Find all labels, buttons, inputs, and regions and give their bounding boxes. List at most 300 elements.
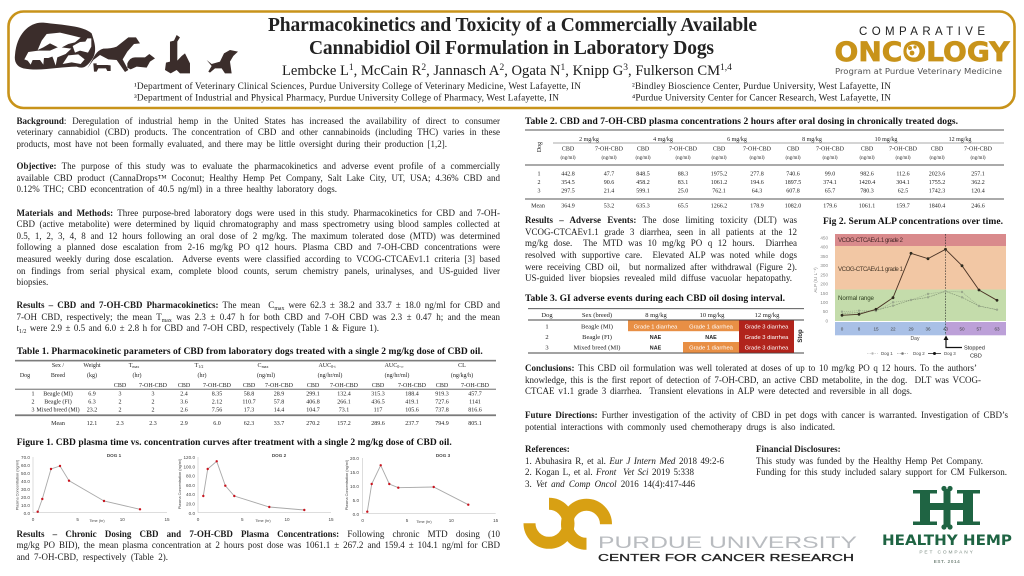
table 2: 83.1: [678, 180, 688, 186]
table 1: 7-OH-CBD: [139, 383, 168, 389]
chart: serum ALP over time: Day: [911, 336, 920, 342]
authors: Lembcke L1, McCain R2, Jannasch A2, Ogata N1, Knipp G3, Fulkerson CM1,4: [282, 63, 732, 79]
table 2: 599.1: [636, 188, 650, 194]
table 1: 117: [374, 408, 382, 414]
logo: Comparative Oncology: [834, 26, 1010, 76]
table 1: 14.4: [274, 408, 284, 414]
line chart: dog 2: 0: [197, 517, 200, 522]
table 2: 297.5: [561, 188, 575, 194]
table 2: (ng/ml): [560, 156, 576, 161]
logo: Healthy Hemp Pet Company: PET COMPANY: [919, 550, 975, 556]
table 1: 2.6: [180, 408, 188, 414]
table 2: 607.8: [786, 188, 800, 194]
text: materials and methods: Materials and Methods: Three purpose-bred laboratory dogs were used in this study. Pharmacokinetics for CBD and 7-OH-: [16, 208, 500, 218]
affiliations: ⁴Purdue University Center for Cancer Research, West Lafayette, IN: [632, 92, 891, 103]
line chart: dog 2: DOG 2: [272, 453, 287, 458]
text: chronic dosing results: and 7-OH-CBD, respectively (Table 2).: [16, 552, 168, 562]
line chart: dog 3: 15.0: [350, 470, 359, 475]
table 1: 1: [32, 392, 34, 398]
line chart: dog 1: 0: [32, 517, 35, 522]
table 2: 374.1: [823, 180, 837, 186]
table 1: T: [129, 363, 133, 369]
line chart: dog 1: 15: [164, 517, 170, 522]
table 2: Dog: [537, 142, 543, 152]
line chart: dog 1: DOG 1: [107, 453, 122, 458]
line chart: dog 2: 15: [328, 517, 334, 522]
table 1: 2: [118, 400, 122, 406]
table 2: 62.5: [898, 188, 908, 194]
text: adverse events results: US-guided liver biopsies revealed mild diffuse vacuolar hepatopathy.: [525, 273, 792, 283]
table 1: 2: [32, 400, 34, 406]
table 1: 105.6: [405, 408, 419, 414]
line chart: dog 3: 10: [449, 518, 454, 523]
table 2: 3: [538, 188, 540, 194]
chart: serum ALP over time: 150: [820, 291, 828, 296]
table 2: (ng/ml): [676, 156, 691, 161]
chart: serum ALP over time: [813, 234, 1006, 360]
line chart: dog 3: 5.0: [353, 498, 359, 503]
table 2: 1840.4: [929, 204, 945, 210]
table 1: 7-OH-CBD: [330, 383, 359, 389]
title: Pharmacokinetics and Toxicity of a Commercially Available: [268, 15, 757, 36]
line chart: dog 3: 0.0: [353, 512, 359, 517]
table 1: (ng/kg/h): [451, 372, 473, 379]
table 3: Beagle (MI): [581, 324, 613, 330]
table 3: Sex (breed): [582, 312, 612, 319]
table 1: CBD: [372, 383, 385, 389]
table 3: 8 mg/kg: [645, 312, 667, 319]
line chart: dog 3: Plasma Concentration (ng/ml): [345, 459, 349, 510]
table 3: Grade 1 diarrhea: [689, 346, 734, 352]
line chart: dog 2: 100.0: [184, 464, 195, 469]
table 2: 982.6: [860, 172, 874, 178]
table 1: 7-OH-CBD: [265, 383, 294, 389]
logo: Comparative Oncology: ONCOLOGY: [834, 37, 1010, 68]
table 2: 64.3: [752, 188, 762, 194]
table 2: 21.4: [604, 188, 614, 194]
line chart: dog 2: 40.0: [186, 492, 195, 497]
table 2: 2023.6: [929, 172, 945, 178]
table 1: (ng/ml): [257, 372, 275, 379]
table 1: [15, 360, 496, 427]
figure 1 caption: Figure 1. CBD plasma time vs. concentration curves after treatment with a single 2 mg/kg dose of CBD oil.: [17, 438, 452, 448]
text: conclusions: CTCAE v1.1 grade 3 diarrhea. Transient elevations in ALP were detected and reversible in all dogs.: [525, 386, 912, 396]
table 3: 2: [545, 334, 549, 341]
table 1: 188.4: [405, 392, 419, 398]
table 1: 12.1: [87, 421, 97, 427]
chart: serum ALP over time: CBD: [970, 354, 982, 360]
chart: serum ALP over time: VCOG-CTCAEv1.1 grade 2: [838, 237, 904, 244]
table 2: (ng/ml): [970, 156, 986, 161]
text: future directions: [525, 410, 1008, 432]
table 3: Grade 1 diarrhea: [634, 324, 678, 330]
table 2 caption: Table 2. CBD and 7-OH-CBD plasma concentrations 2 hours after oral dosing in chronically treated dogs.: [525, 117, 958, 127]
table 2: 442.8: [561, 172, 575, 178]
table 1: 2.3: [116, 421, 124, 427]
table 2: CBD: [787, 146, 800, 152]
line chart: dog 1: [16, 453, 170, 523]
table 1: 406.8: [306, 400, 320, 406]
table 2: 7-OH-CBD: [595, 146, 624, 152]
table 2: 2: [538, 180, 540, 186]
table 1: CBD: [243, 383, 256, 389]
table 2: 53.2: [604, 204, 614, 210]
table 2: 7-OH-CBD: [889, 146, 918, 152]
table 2: 7-OH-CBD: [816, 146, 845, 152]
table 1: 73.1: [339, 408, 349, 414]
table 1: max: [132, 364, 139, 369]
table 1: 8.35: [212, 392, 222, 398]
table 3: NAE: [650, 346, 662, 352]
line chart: dog 2: 60.0: [186, 483, 195, 488]
title: [268, 15, 757, 59]
line chart: dog 2: 10: [284, 517, 290, 522]
table 3: NAE: [650, 335, 662, 341]
table 2: 740.6: [786, 172, 800, 178]
table 2: CBD: [861, 146, 874, 152]
table 1: Dog: [20, 373, 30, 379]
text: adverse events results: Results – Adverse Events: The dose limiting toxicity (DLT) was: [525, 215, 797, 225]
table 1: CL: [458, 363, 466, 369]
chart: serum ALP over time: 8: [858, 326, 861, 332]
text: future directions: potential interactions with commonly used chemotherapy drugs is also indicated.: [525, 422, 835, 432]
text: financial disclosures: Funding for this study included salary support for CM Fulkerson.: [756, 467, 1007, 477]
text: materials and methods: CBD (active metabolite) were determined by liquid chromatography and mass spectrometry using blood samples collected at: [16, 219, 500, 229]
line chart: dog 3: DOG 3: [436, 453, 451, 458]
text: objective: available CBD product (CannaDrops™ Coconut; Healthy Hemp Pet Company, Salt Lake City, UT, USA; 4.36% CBD and: [16, 173, 500, 183]
title: Cannabidiol Oil Formulation in Laboratory Dogs: [309, 38, 714, 59]
line chart: dog 2: 80.0: [186, 474, 195, 479]
table 3: 10 mg/kg: [700, 312, 725, 319]
table 2: (ng/ml): [930, 156, 945, 161]
chart: serum ALP over time: Dog 2: [913, 351, 925, 356]
table 2: (ng/ml): [896, 156, 911, 161]
table 2: 1082.0: [785, 204, 801, 210]
table 1: 7-OH-CBD: [203, 383, 232, 389]
line chart: dog 2: 5: [241, 517, 244, 522]
text: materials and methods: on findings from serial physical exam, complete blood counts, serum chemistry panels, urinalyses, and US-guided liver: [16, 266, 500, 276]
table 2: 4 mg/kg: [653, 137, 673, 143]
table 1: 2.12: [212, 400, 222, 406]
table 2: 1: [538, 172, 540, 178]
text: materials and methods: following a planned dose escalation from 2-16 mg/kg PO q12 hours. Plasma CBD and 7-OH-CBD concentrations were: [16, 242, 500, 252]
table 2: 1742.3: [929, 188, 945, 194]
table 1: 727.6: [435, 400, 449, 406]
chart: serum ALP over time: Dog 3: [944, 351, 956, 356]
table 1: 132.4: [337, 392, 351, 398]
table 2: 12 mg/kg: [949, 137, 971, 143]
table 1: Mean: [51, 421, 65, 427]
table 2: 1266.2: [711, 204, 727, 210]
table 1: 7.56: [212, 408, 222, 414]
table 2: CBD: [562, 146, 575, 152]
table 2: 1975.2: [711, 172, 727, 178]
table 2: 65.7: [825, 188, 835, 194]
table 1: 3.6: [180, 400, 188, 406]
logo: Purdue University Center for Cancer Research: PURDUE UNIVERSITY: [598, 533, 857, 552]
line chart: dog 1: 20.0: [21, 495, 30, 500]
table 3: Stop: [798, 329, 804, 343]
table 2: 635.3: [636, 204, 650, 210]
table 1: 2.4: [180, 392, 188, 398]
affiliations: ³Department of Industrial and Physical Pharmacy, Purdue University College of Pharmacy, West Lafayette, IN: [134, 92, 559, 103]
line chart: dog 1: 50.0: [21, 471, 30, 476]
table 2: 120.4: [971, 188, 985, 194]
line chart: dog 3: [345, 453, 499, 524]
table 1: CBD: [114, 383, 127, 389]
table 1: Sex /: [52, 363, 64, 369]
table 2: 65.5: [678, 204, 688, 210]
table 2: 90.6: [604, 180, 614, 186]
table 3: 3: [545, 344, 549, 352]
table 1: CBD: [436, 383, 449, 389]
chart: serum ALP over time: 29: [908, 326, 914, 332]
chart: serum ALP over time: 50: [959, 326, 965, 332]
table 1: 2.9: [180, 421, 188, 427]
table 1: (hr): [198, 372, 206, 379]
text: background: [16, 116, 500, 149]
table 2: CBD: [713, 146, 726, 152]
table 2: 112.6: [896, 172, 910, 178]
line chart: dog 3: Time (hr): [416, 520, 432, 524]
text: financial disclosures: Financial Disclosures:: [756, 444, 841, 454]
table 1: Weight: [83, 363, 101, 369]
text: conclusions: knowledge, this is the first report of detection of 7-OH-CBD, an active CBD metabolite, in the dog. DLT was VCOG-: [525, 375, 981, 385]
table 1: 289.6: [371, 421, 385, 427]
table 1: 28.9: [274, 392, 284, 398]
chart: serum ALP over time: ALP (IU L⁻¹): [813, 267, 818, 293]
table 3: NAE: [705, 335, 717, 341]
line chart: dog 1: 5: [76, 517, 79, 522]
text: adverse events results: mg/kg dose. The MTD was 10 mg/kg PO q 12 hours. Diarrhea: [525, 238, 797, 248]
affiliations: ¹Department of Veterinary Clinical Sciences, Purdue University College of Veterinary Medicine, West Lafayette, IN: [134, 81, 581, 92]
table 2: 364.9: [561, 204, 575, 210]
line chart: dog 1: 30.0: [21, 487, 30, 492]
table 1: Beagle (MI): [43, 390, 73, 398]
line chart: dog 2: [178, 453, 334, 523]
table 1: (kg): [87, 372, 97, 379]
table 3: 12 mg/kg: [755, 312, 780, 319]
table 3: Dog: [541, 312, 553, 319]
chart: serum ALP over time: 57: [976, 326, 982, 332]
chart: serum ALP over time: 350: [820, 254, 828, 259]
table 2: 179.6: [823, 204, 837, 210]
table 1: 7-OH-CBD: [461, 383, 490, 389]
table 1: 1141: [469, 400, 481, 406]
text: adverse events results: [525, 215, 797, 283]
chart: serum ALP over time: 300: [820, 263, 828, 268]
chart: serum ALP over time: Stopped: [964, 346, 985, 352]
table 1: 23.2: [87, 408, 97, 414]
table 1: 6.3: [88, 400, 96, 406]
chart: serum ALP over time: 22: [890, 326, 896, 332]
line chart: dog 1: 40.0: [21, 479, 30, 484]
line chart: dog 1: Plasma Concentration (ng/ml): [16, 459, 20, 510]
line chart: dog 3: 15: [493, 518, 499, 523]
table 1: 3: [32, 408, 34, 414]
table 2: 88.3: [678, 172, 688, 178]
table 1: 6.0: [213, 421, 221, 427]
table 2: (ng/ml): [860, 156, 875, 161]
text: references: [525, 444, 724, 489]
table 1: T: [195, 363, 199, 369]
table 2: CBD: [637, 146, 650, 152]
table 1: 1/2: [198, 364, 203, 369]
table 3: [528, 309, 804, 353]
table 2: 8 mg/kg: [802, 137, 822, 143]
text: chronic dosing results: [16, 529, 500, 562]
text: financial disclosures: This study was funded by the Healthy Hemp Pet Company.: [756, 456, 983, 466]
line chart: dog 2: Plasma Concentration (ng/ml): [178, 458, 182, 509]
table 1: 919.3: [435, 392, 449, 398]
text: adverse events results: were receiving CBD oil, but normalized after withdrawal (Figure 2).: [525, 262, 797, 272]
table 3: Beagle (FI): [582, 334, 612, 341]
chart: serum ALP over time: 450: [820, 236, 828, 240]
table 2: 7-OH-CBD: [669, 146, 698, 152]
text: background: Background: Deregulation of industrial hemp in the United States has increased the availability of direct to consumer: [16, 116, 500, 126]
table 1: 58.8: [244, 392, 254, 398]
table 1: 805.1: [468, 421, 482, 427]
text: pharmacokinetics results: [16, 300, 500, 335]
text: conclusions: [525, 363, 981, 396]
text: references: 2. Kogan L, et al. Front Vet Sci 2019 5:338: [525, 467, 694, 477]
table 2: 1755.2: [929, 180, 945, 186]
table 1: 33.7: [274, 421, 284, 427]
table 1: 6.9: [88, 392, 96, 398]
logo: Healthy Hemp Pet Company: [882, 486, 1012, 564]
table 2: (ng/ml): [786, 156, 801, 161]
table 2: 10 mg/kg: [875, 137, 897, 143]
table 1: C: [258, 363, 262, 369]
table 1: 315.3: [371, 392, 385, 398]
table 2: 1420.4: [859, 180, 875, 186]
table 2: 848.5: [636, 172, 650, 178]
line chart: dog 2: 120.0: [184, 455, 195, 460]
table 1: Beagle (FI): [44, 398, 72, 406]
text: materials and methods: measured weekly during dose escalation. Adverse events were classified according to VCOG-CTCAEv1.1 criteria [3] based: [16, 254, 500, 264]
line chart: dog 1: 10: [120, 517, 125, 522]
table 1: 2: [152, 408, 154, 414]
text: objective: 0.12% THC; CBD econcentration of 40.5 ng/ml) in a three healthy laboratory dogs.: [16, 184, 337, 194]
line chart: dog 1: 10.0: [21, 503, 30, 508]
text: materials and methods: [16, 208, 500, 287]
table 1: 2.3: [149, 421, 157, 427]
table 1: AUC: [385, 363, 397, 369]
table 1: 266.1: [337, 400, 351, 406]
table 2: 458.2: [636, 180, 650, 186]
chart: serum ALP over time: 36: [925, 326, 931, 332]
table 1: 157.2: [337, 421, 351, 427]
line chart: dog 2: Time (hr): [255, 519, 271, 523]
line chart: dog 1: 70.0: [21, 455, 30, 460]
table 3 caption: Table 3. GI adverse events during each CBD oil dosing interval.: [525, 294, 785, 304]
table 3: 1: [545, 324, 549, 330]
table 2: 25.0: [678, 188, 688, 194]
table 2: 257.1: [971, 172, 985, 178]
table 2: 47.7: [604, 172, 614, 178]
table 1: 270.2: [306, 421, 320, 427]
table 1: 2: [152, 400, 154, 406]
text: objective: [16, 161, 500, 194]
chart: serum ALP over time: 0: [825, 318, 828, 324]
table 1: 57.8: [274, 400, 284, 406]
line chart: dog 3: 0: [361, 518, 364, 523]
line chart: dog 2: 0.0: [189, 511, 195, 516]
table 1: Breed: [51, 373, 65, 379]
table 1: 62.3: [244, 421, 254, 427]
table 1: Mixed breed (MI): [36, 406, 80, 414]
text: references: References:: [525, 444, 570, 454]
chart: serum ALP over time: 100: [820, 300, 828, 305]
chart: serum ALP over time: Dog 1: [881, 351, 893, 356]
table 1: (ng/hr/ml): [318, 372, 342, 379]
chart: serum ALP over time: 400: [820, 245, 828, 250]
table 2: 1897.5: [785, 180, 801, 186]
table 1: 0-∞: [397, 364, 404, 369]
text: references: 1. Abuhasira R, et al. Eur J Intern Med 2018 49:2-6: [525, 456, 724, 466]
table 1: max: [262, 364, 268, 369]
text: materials and methods: 0.5, 1, 2, 3, 4, 8 and 12 hours following an oral dose of 2 mg/kg. The maximum tolerated dose (MTD) was determined: [16, 231, 500, 241]
table 1: 2: [118, 408, 122, 414]
chart: serum ALP over time: 250: [820, 272, 828, 277]
table 2: (ng/ml): [636, 156, 651, 161]
line chart: dog 2: 20.0: [186, 502, 195, 506]
table 1: 737.8: [435, 408, 449, 414]
table 1: AUC: [318, 363, 331, 369]
table 3: Grade 1 diarrhea: [689, 324, 734, 330]
table 1: 7-OH-CBD: [398, 383, 427, 389]
line chart: dog 1: 60.0: [21, 463, 30, 468]
line chart: dog 1: Time (hr): [89, 519, 105, 523]
text: background: products, most have not been formally evaluated, and there may be little oversight during their production [1,2].: [16, 139, 447, 149]
header banner frame: [8, 12, 1014, 108]
table 1: 816.6: [468, 408, 482, 414]
affiliations: ²Bindley Bioscience Center, Purdue University, West Lafayette, IN: [632, 81, 891, 92]
table 2: 7-OH-CBD: [964, 146, 993, 152]
chart: serum ALP over time: 200: [820, 282, 828, 287]
table 1: 794.9: [435, 421, 449, 427]
table 2: [525, 130, 1004, 210]
table 1: CBD: [178, 383, 191, 389]
table 2: 780.3: [860, 188, 874, 194]
table 1: 299.1: [306, 392, 320, 398]
table 2: (ng/ml): [602, 156, 617, 161]
chart: serum ALP over time: 0: [841, 326, 844, 332]
table 1: 237.7: [405, 421, 419, 427]
table 1: 457.7: [468, 392, 482, 398]
line chart: dog 3: 10.0: [350, 484, 359, 489]
table 1: (hr): [132, 372, 142, 379]
table 3: Mixed breed (MI): [574, 344, 620, 352]
text: references: 3. Vet and Comp Oncol 2016 14(4):417-446: [525, 479, 695, 489]
table 2: 277.8: [750, 172, 764, 178]
table 3: Grade 3 diarrhea: [745, 324, 789, 330]
table 1: (ng/hr/ml): [385, 372, 409, 379]
logo: Healthy Hemp Pet Company: EST. 2014: [934, 559, 960, 564]
chart: serum ALP over time: 63: [994, 326, 1000, 332]
table 2: 246.6: [971, 204, 985, 210]
table 2: (ng/ml): [822, 156, 838, 161]
table 2: 6 mg/kg: [727, 137, 747, 143]
table 2: 7-OH-CBD: [743, 146, 772, 152]
table 2: 362.2: [971, 180, 985, 186]
table 1: 436.5: [371, 400, 385, 406]
table 3: Grade 3 diarrhea: [745, 335, 789, 341]
logo: Healthy Hemp Pet Company: HEALTHY HEMP: [882, 533, 1012, 549]
table 2: 159.7: [896, 204, 910, 210]
chart: serum ALP over time: VCOG-CTCAEv1.1 grade 1: [838, 266, 904, 273]
text: conclusions: Conclusions: This CBD oil formulation was well tolerated at doses of up to 10 mg/kg PO q 12 hours. To the authors’: [525, 363, 977, 373]
